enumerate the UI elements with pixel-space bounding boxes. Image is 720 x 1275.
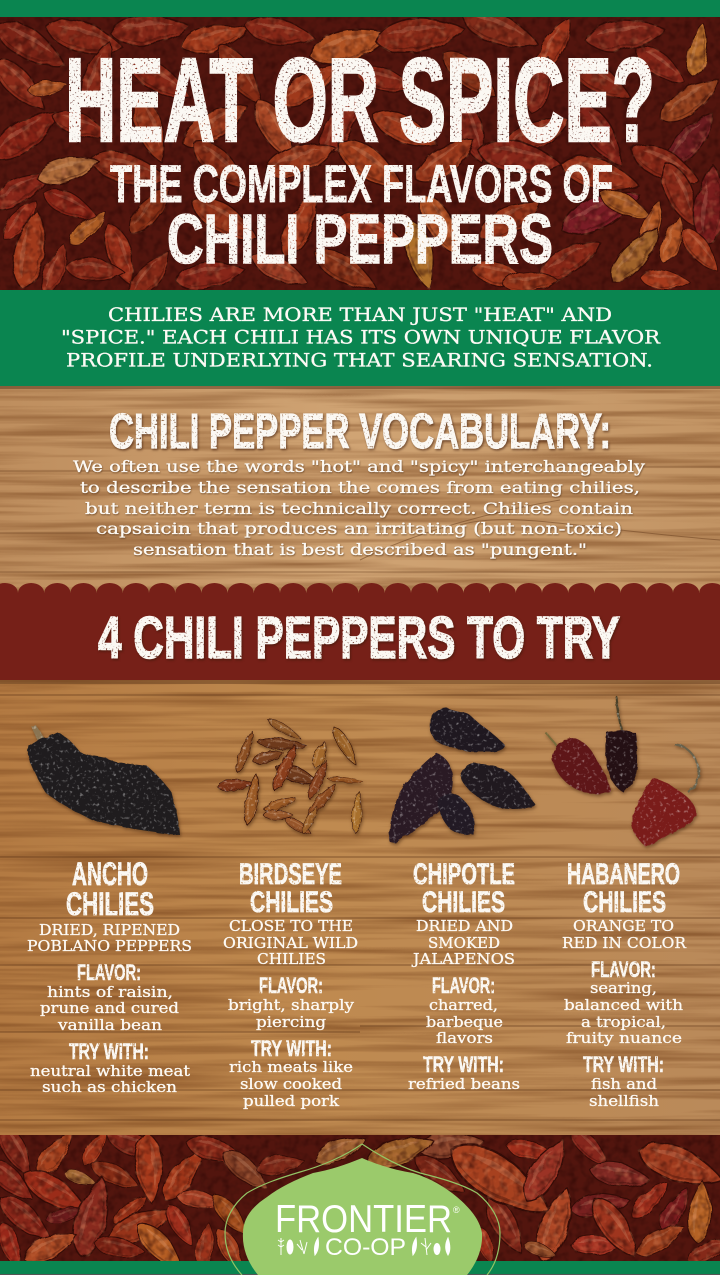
panel: green intro: CHILIES ARE MORE THAN JUST "HEAT" AND: [108, 305, 612, 326]
column: birdseye chilies: BIRDSEYE: [239, 858, 342, 891]
column: chipotle chilies: CHILIES: [422, 886, 505, 919]
column: birdseye chilies: slow cooked: [240, 1077, 342, 1093]
column: ancho chilies: [27, 856, 192, 1096]
panel: lower wood background: [0, 679, 720, 1136]
column: chipotle chilies: refried beans: [408, 1077, 520, 1093]
column: birdseye chilies: CHILIES: [257, 950, 326, 968]
column: ancho chilies: ANCHO: [72, 856, 148, 892]
column: birdseye chilies: FLAVOR:: [259, 973, 323, 998]
column: chipotle chilies: SMOKED: [428, 934, 500, 952]
top green bar: [0, 0, 720, 17]
column: ancho chilies: hints of raisin,: [47, 985, 173, 1001]
panel: chili photo footer: [0, 1118, 720, 1275]
logo: frontier co-op: CO-OP: [325, 1234, 406, 1261]
column: birdseye chilies: ORIGINAL WILD: [223, 934, 358, 952]
column: habanero chilies: fruity nuance: [566, 1031, 682, 1047]
panel: green intro: "SPICE." EACH CHILI HAS ITS OWN UNIQUE FLAVOR: [61, 328, 661, 348]
column: birdseye chilies: TRY WITH:: [251, 1036, 332, 1061]
column: ancho chilies: POBLANO PEPPERS: [27, 937, 192, 955]
text block: vocabulary body: [73, 458, 645, 559]
image: ancho pepper: [27, 725, 180, 835]
column: chipotle chilies: barbeque: [426, 1015, 503, 1031]
column: birdseye chilies: bright, sharply: [228, 998, 355, 1014]
panel: chili photo header: [0, 2, 720, 305]
column: ancho chilies: neutral white meat: [30, 1064, 190, 1080]
image: birdseye peppers: [217, 716, 363, 837]
column: birdseye chilies: piercing: [256, 1015, 326, 1031]
column: ancho chilies: CHILIES: [66, 886, 154, 922]
column: birdseye chilies: rich meats like: [229, 1060, 353, 1076]
panel: vocabulary wood background: [0, 386, 720, 601]
column: ancho chilies: DRIED, RIPENED: [39, 921, 180, 939]
column: habanero chilies: FLAVOR:: [591, 957, 656, 982]
column: chipotle chilies: charred,: [429, 998, 498, 1014]
icon: right herb sprigs: [412, 1238, 450, 1255]
panel: green intro: PROFILE UNDERLYING THAT SEARING SENSATION.: [66, 350, 653, 372]
column: ancho chilies: TRY WITH:: [69, 1039, 149, 1064]
logo: frontier co-op: ®: [453, 1205, 460, 1215]
logo: frontier co-op: [225, 1144, 500, 1275]
column: ancho chilies: such as chicken: [42, 1080, 177, 1096]
image: chipotle peppers: [390, 708, 536, 843]
column: ancho chilies: prune and cured: [40, 1001, 179, 1017]
subtitle: CHILI PEPPERS: [167, 200, 553, 278]
logo: frontier co-op: FRONTIER: [275, 1198, 452, 1241]
subtitle: [110, 155, 613, 278]
column: habanero chilies: fish and: [591, 1077, 657, 1093]
column: habanero chilies: searing,: [590, 981, 657, 997]
text block: vocabulary body: to describe the sensation the comes from eating chilies,: [80, 479, 640, 497]
image: habanero peppers: [546, 696, 699, 847]
column: chipotle chilies: [408, 858, 520, 1093]
text block: vocabulary body: but neither term is technically correct. Chilies contain: [85, 500, 633, 518]
column: ancho chilies: vanilla bean: [57, 1018, 162, 1034]
column: habanero chilies: [562, 858, 687, 1110]
text block: vocabulary body: We often use the words "hot" and "spicy" interchangeably: [73, 458, 645, 476]
column: chipotle chilies: CHIPOTLE: [413, 858, 515, 891]
column: habanero chilies: shellfish: [589, 1094, 659, 1110]
column: chipotle chilies: DRIED AND: [416, 917, 513, 935]
column: habanero chilies: a tropical,: [581, 1015, 666, 1031]
column: birdseye chilies: CHILIES: [250, 886, 333, 919]
column: habanero chilies: TRY WITH:: [583, 1052, 664, 1077]
column: birdseye chilies: pulled pork: [243, 1094, 339, 1110]
column: habanero chilies: ORANGE TO: [573, 917, 674, 935]
text block: vocabulary body: capsaicin that produces an irritating (but non-toxic): [96, 520, 622, 538]
column: chipotle chilies: flavors: [436, 1031, 493, 1047]
column: chipotle chilies: JALAPENOS: [411, 950, 515, 968]
column: habanero chilies: CHILIES: [583, 886, 666, 919]
column: chipotle chilies: TRY WITH:: [423, 1052, 504, 1077]
column: birdseye chilies: [223, 858, 358, 1110]
text block: vocabulary body: sensation that is best described as "pungent.": [133, 541, 587, 559]
panel: green intro: [0, 290, 720, 386]
column: ancho chilies: FLAVOR:: [77, 960, 141, 985]
bottom green bar: [0, 1261, 720, 1275]
column: birdseye chilies: CLOSE TO THE: [229, 917, 353, 935]
column: habanero chilies: RED IN COLOR: [562, 934, 687, 952]
column: chipotle chilies: FLAVOR:: [432, 973, 495, 998]
banner: 4 chili peppers to try: [0, 583, 720, 680]
icon: left herb sprigs: [278, 1238, 319, 1255]
column: habanero chilies: balanced with: [564, 998, 683, 1014]
